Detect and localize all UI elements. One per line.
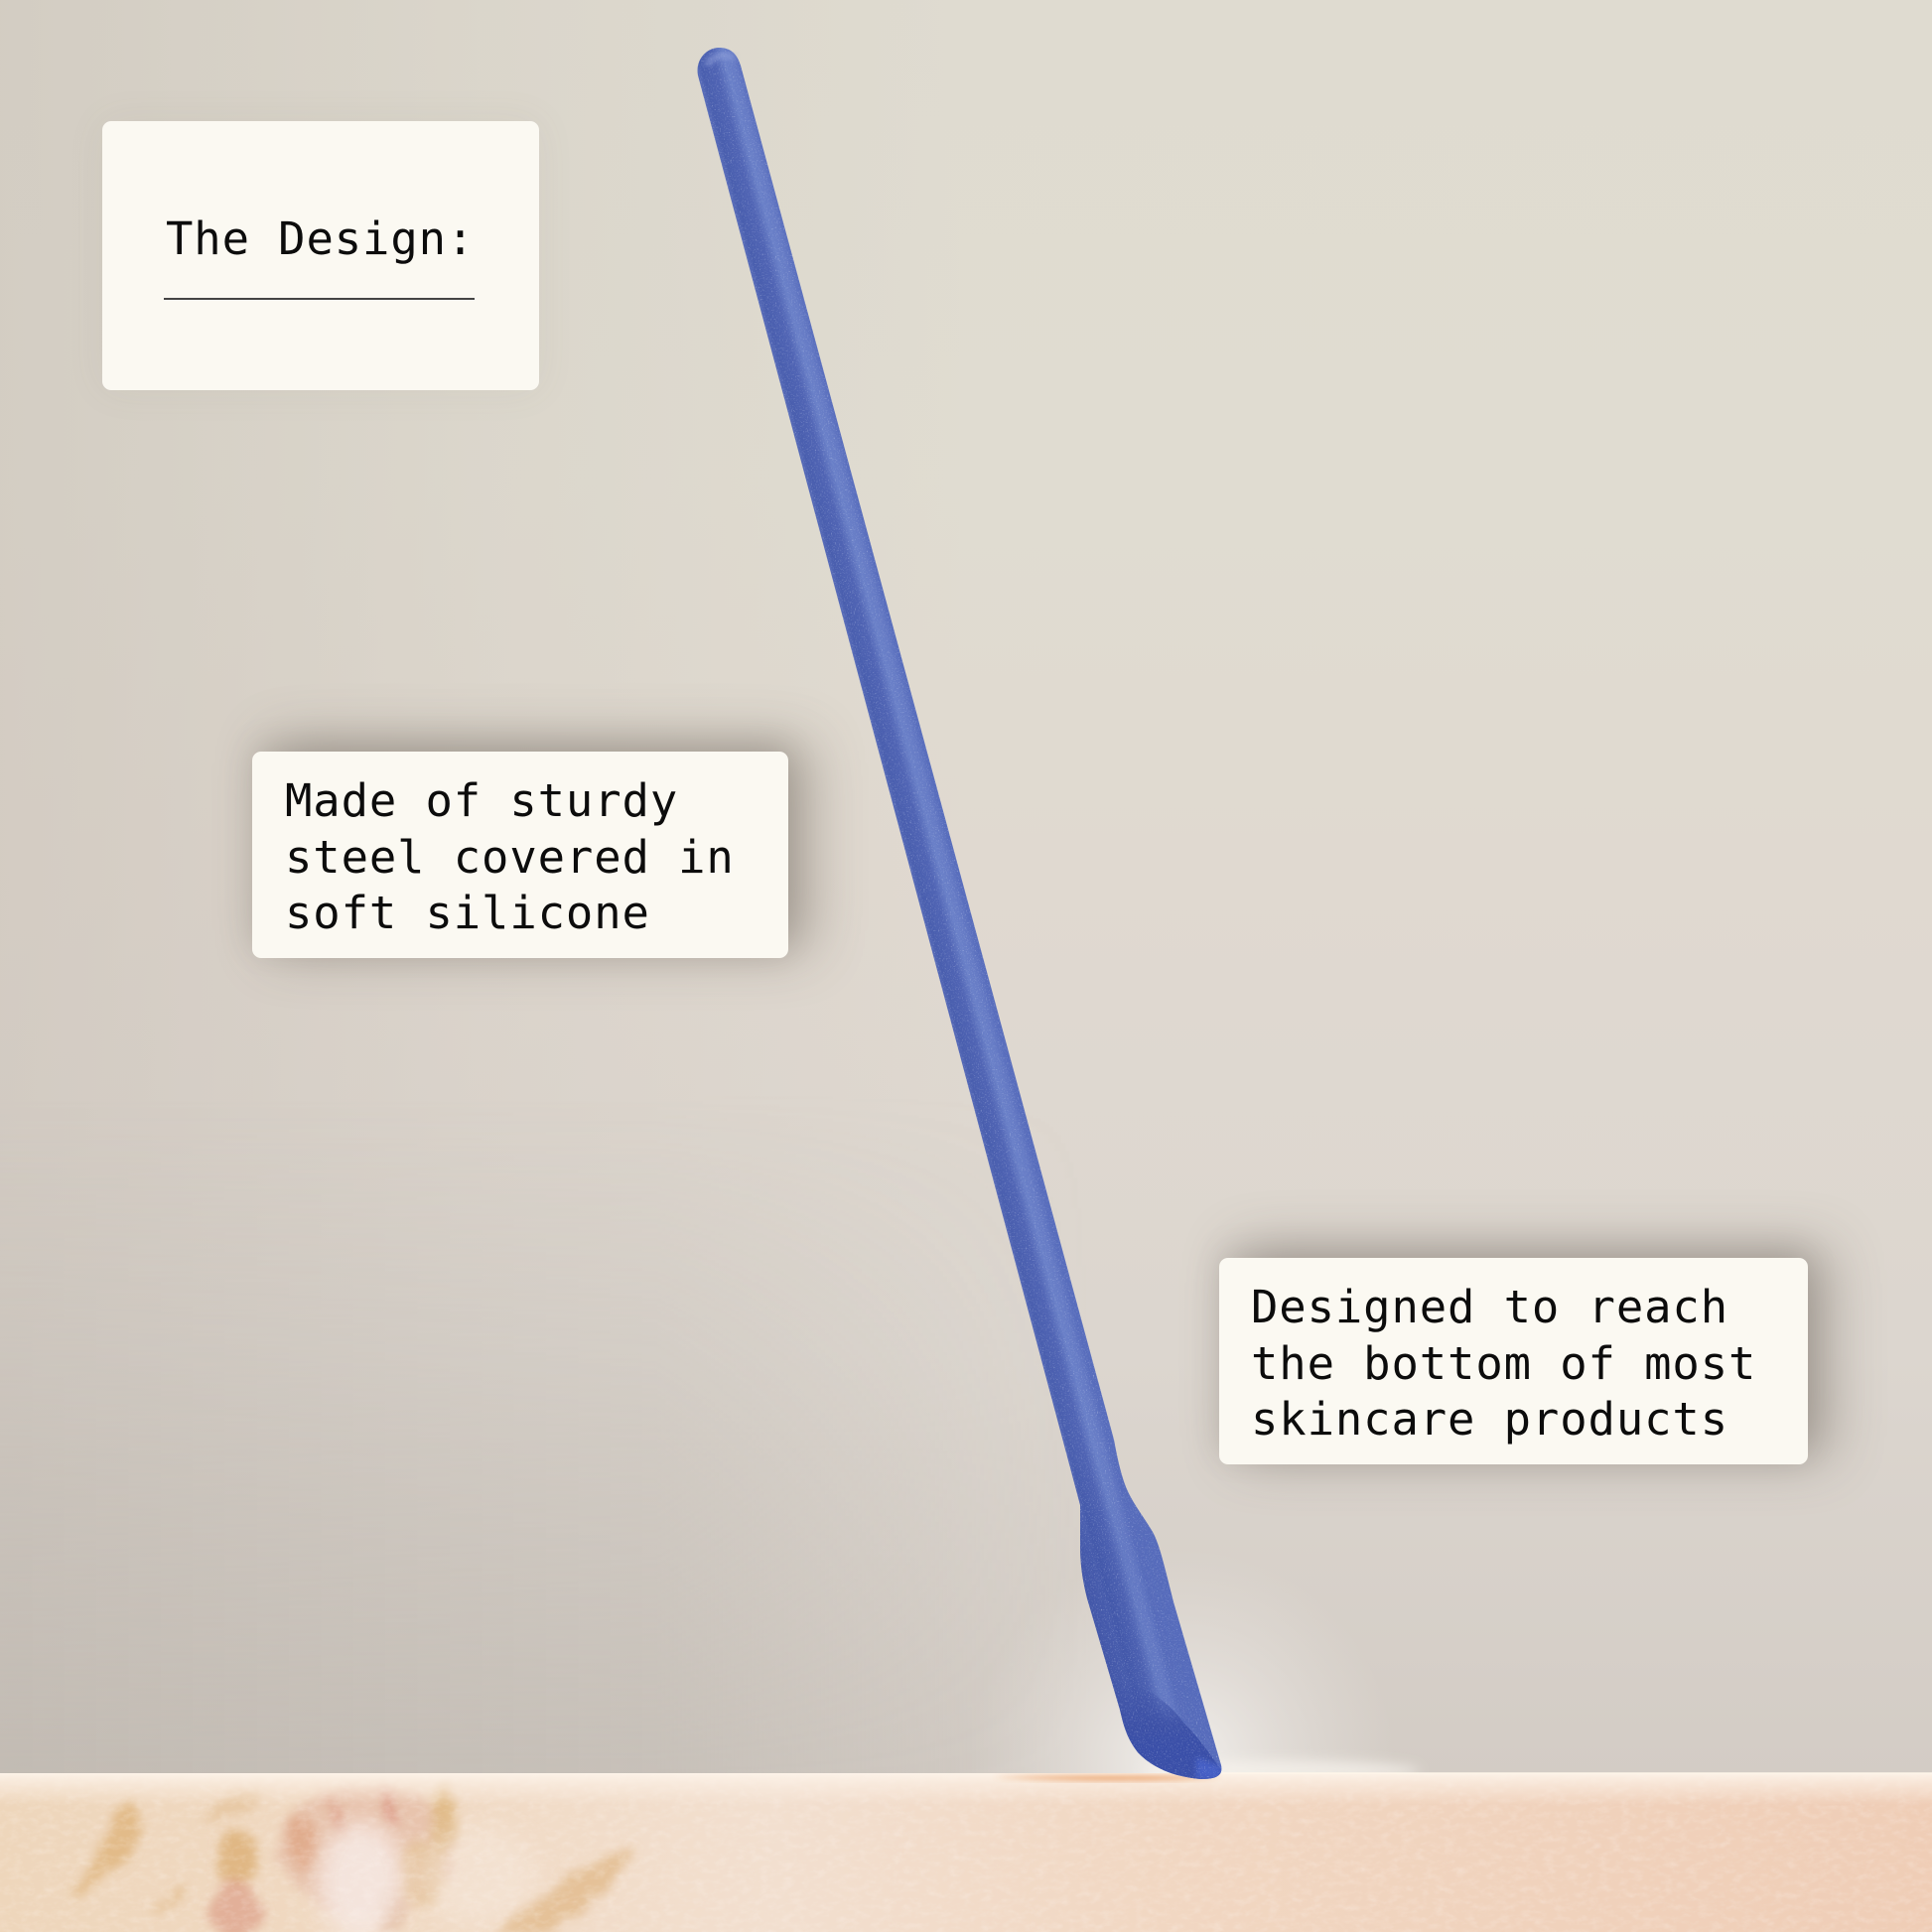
reach text: Designed to reach the bottom of most skincare products — [1251, 1281, 1756, 1446]
spatula bevel — [1116, 1695, 1221, 1779]
card: The Design title — [102, 121, 539, 390]
icon: blue silicone spatula — [685, 40, 1251, 1787]
title: The Design: — [166, 212, 475, 265]
marble veins and stains — [75, 1782, 635, 1932]
spatula blade shading — [1074, 1481, 1175, 1775]
card: material callout — [252, 752, 788, 958]
material text: Made of sturdy steel covered in soft silicone — [285, 774, 735, 939]
spatula silicone grain — [685, 40, 1241, 1787]
marble grain — [0, 1793, 1932, 1932]
title underline — [164, 298, 475, 300]
card: reach callout — [1219, 1258, 1808, 1464]
spatula body — [698, 48, 1221, 1779]
contact shadow — [993, 1775, 1221, 1780]
marble surface — [0, 1772, 1932, 1932]
